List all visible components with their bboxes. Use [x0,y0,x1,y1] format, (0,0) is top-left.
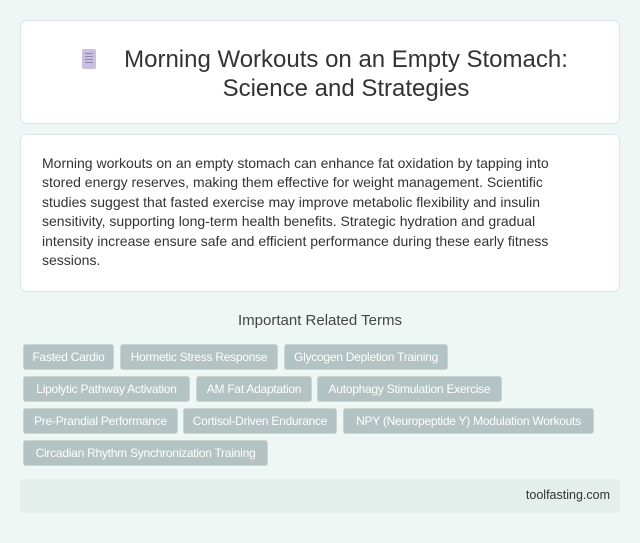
summary paragraph: stored energy reserves, making them effective for weight management. Scientific [42,174,543,190]
footer text: toolfasting.com [526,488,610,502]
tags: Circadian Rhythm Synchronization Training [36,446,255,460]
tags: AM Fat Adaptation [207,382,301,396]
tags: Autophagy Stimulation Exercise [329,382,490,396]
tags: Hormetic Stress Response [131,350,267,364]
summary paragraph: intensity increase ensure safe and efficient performance during these early fitness [42,233,548,249]
tags: Lipolytic Pathway Activation [36,382,177,396]
title: Morning Workouts on an Empty Stomach: Science and Strategies [124,46,568,102]
tags: Pre-Prandial Performance [34,414,167,428]
tags: Fasted Cardio [32,350,105,364]
summary paragraph: sensitivity, supporting long-term health benefits. Strategic hydration and gradual [42,213,535,229]
tags: Cortisol-Driven Endurance [193,414,327,428]
terms heading: Important Related Terms [238,312,402,329]
summary paragraph: Morning workouts on an empty stomach can enhance fat oxidation by tapping into [42,155,549,171]
tags: Glycogen Depletion Training [294,350,438,364]
tags: NPY (Neuropeptide Y) Modulation Workouts [356,414,581,428]
summary paragraph: studies suggest that fasted exercise may improve metabolic flexibility and insulin [42,194,540,210]
icon: document [82,49,96,69]
summary paragraph: sessions. [42,252,100,268]
summary card [20,134,620,292]
footer [20,479,620,513]
header card [20,20,620,124]
summary paragraph [42,155,549,268]
